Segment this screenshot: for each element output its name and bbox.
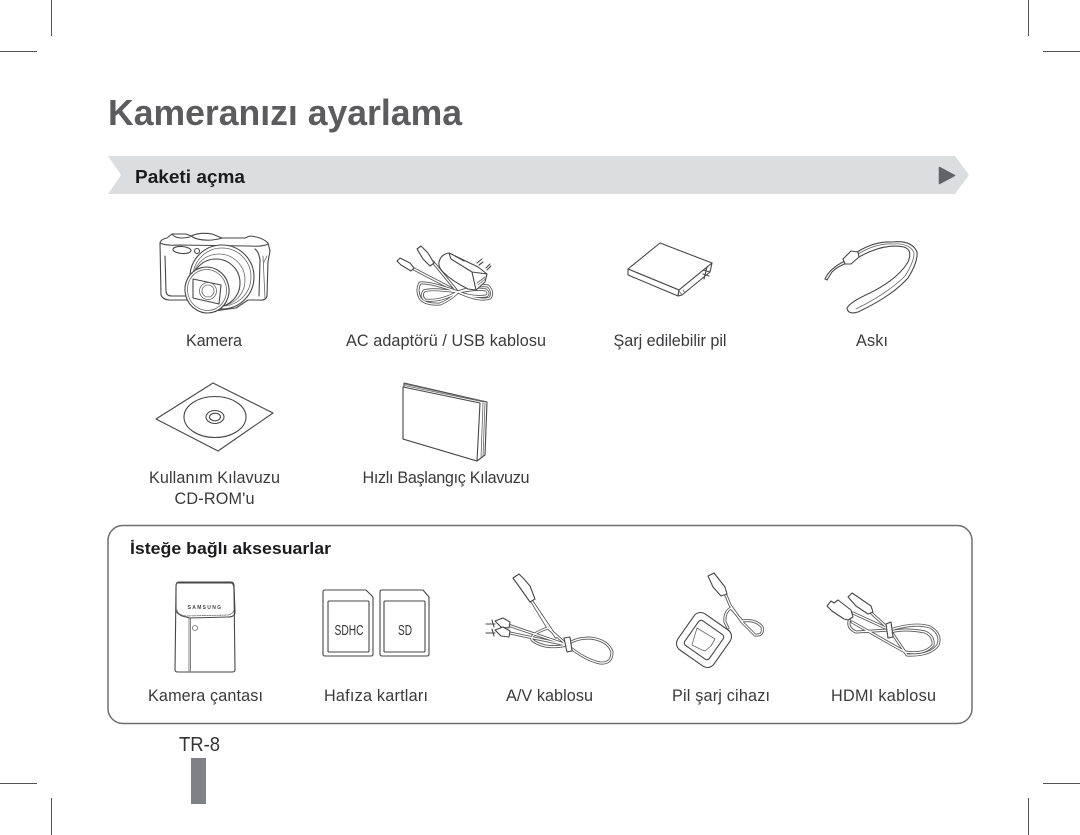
- panel heading: İsteğe bağlı aksesuarlar: [130, 539, 331, 558]
- panel: optional accessories: [108, 526, 972, 724]
- icon: camera case: [175, 582, 235, 672]
- label: HDMI kablosu: HDMI kablosu: [831, 687, 936, 705]
- icon: AC adapter and USB cable: [397, 246, 492, 304]
- icon: HDMI cable: [827, 593, 939, 655]
- section banner: Paketi açma: [108, 156, 969, 194]
- icon: battery charger: [673, 573, 762, 671]
- label: Şarj edilebilir pil: Şarj edilebilir pil: [614, 332, 726, 350]
- label: Hafıza kartları: Hafıza kartları: [324, 687, 428, 705]
- icon: SDHC and SD memory cards: [323, 590, 429, 656]
- icon: CD-ROM sleeve: [156, 383, 273, 451]
- title: Kameranızı ayarlama: [108, 92, 463, 133]
- label: Askı: Askı: [856, 332, 888, 350]
- label: AC adaptörü / USB kablosu: AC adaptörü / USB kablosu: [346, 332, 546, 350]
- label: Kamera: Kamera: [186, 332, 242, 350]
- text: CD-ROM'u: [174, 490, 254, 508]
- icon: rechargeable battery: [628, 243, 712, 296]
- label: A/V kablosu: A/V kablosu: [506, 687, 593, 705]
- label: Pil şarj cihazı: Pil şarj cihazı: [672, 687, 770, 705]
- page number: TR-8: [179, 734, 220, 756]
- icon: camera: [160, 233, 270, 318]
- page tab marker: [191, 758, 206, 804]
- section heading: Paketi açma: [135, 167, 246, 187]
- icon: SDHC and SD memory cards: SD: [398, 622, 412, 639]
- logo text: SAMSUNG: [188, 605, 222, 611]
- label: Kullanım Kılavuzu CD-ROM'u: Kullanım Kılavuzu: [149, 469, 280, 487]
- icon: SDHC and SD memory cards: SDHC: [334, 622, 364, 639]
- icon: next arrow: [940, 168, 954, 184]
- icon: quick start booklet: [403, 383, 487, 461]
- label: Kamera çantası: Kamera çantası: [148, 687, 263, 705]
- icon: wrist strap: [825, 242, 917, 313]
- label: Hızlı Başlangıç Kılavuzu: Hızlı Başlangıç Kılavuzu: [362, 469, 530, 487]
- icon: A/V cable: [486, 574, 612, 663]
